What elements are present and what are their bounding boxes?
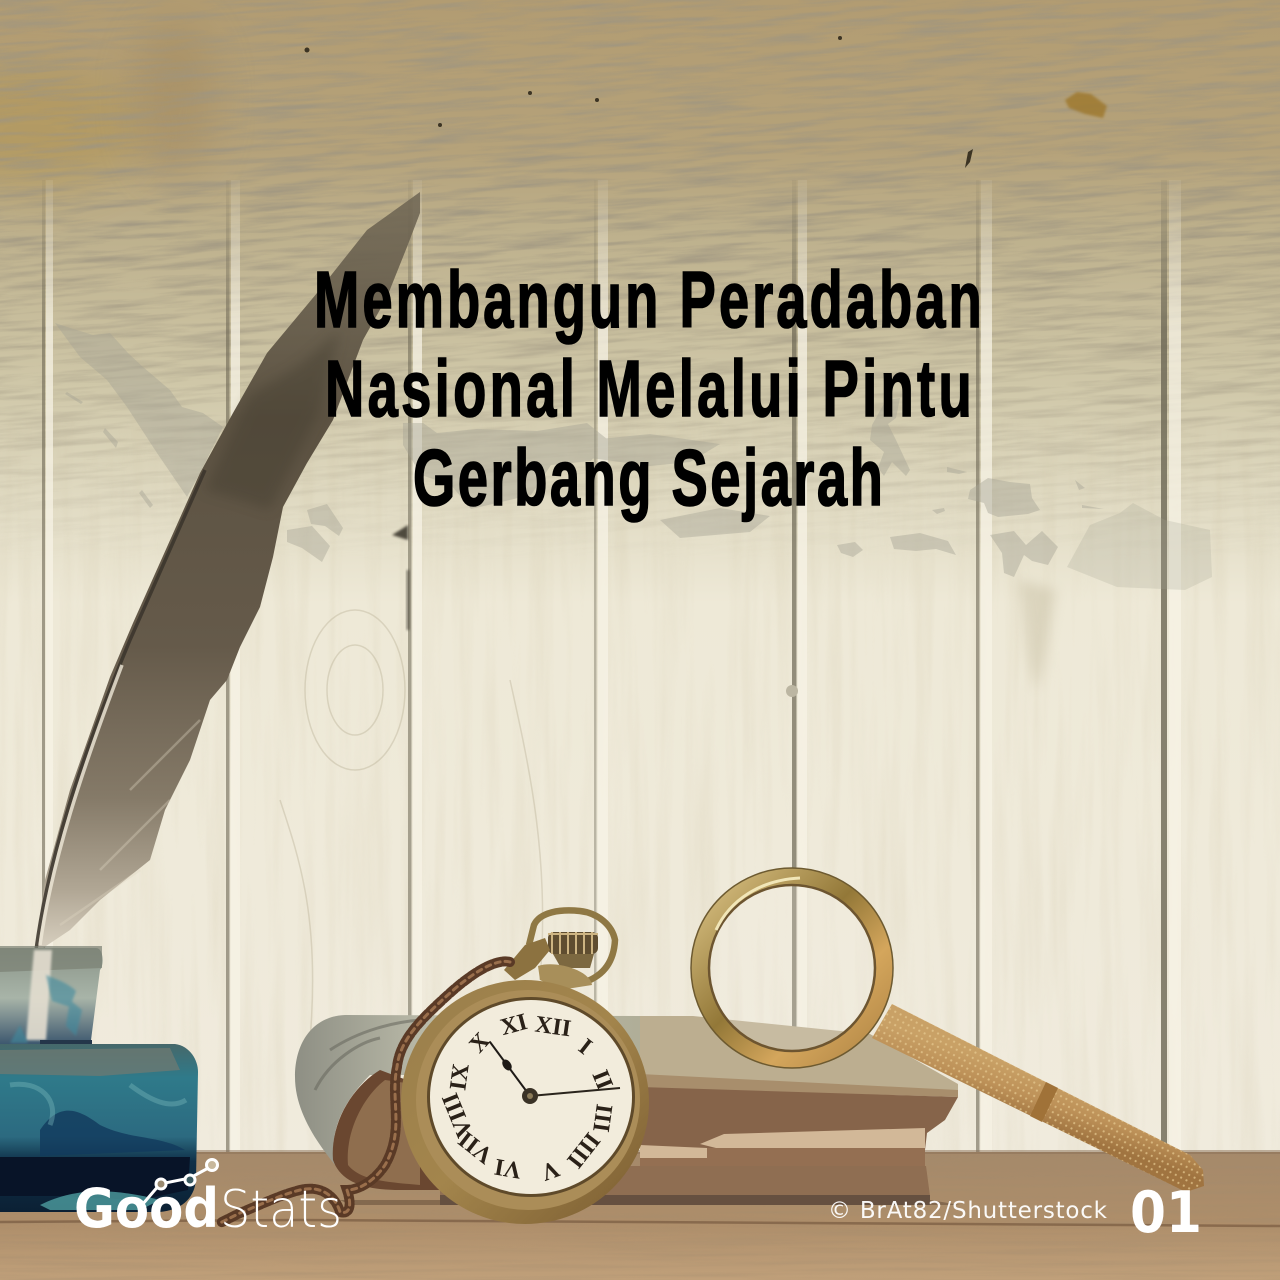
title: Nasional Melalui Pintu [325,345,972,434]
logo: GoodStats: Good [74,1177,219,1240]
clock numerals: XI [498,1009,530,1041]
clock numerals: XII [533,1012,573,1042]
chain [220,961,510,1223]
page number: 01 [1130,1180,1202,1246]
clock numerals [437,1009,618,1185]
clock numerals: X [465,1027,496,1058]
clock numerals: VI [493,1153,523,1183]
table [0,1150,1280,1280]
icon: feather quill [35,192,420,950]
clock numerals: IIII [561,1127,605,1173]
title: Gerbang Sejarah [413,434,883,523]
clock numerals: V [537,1155,563,1185]
title: Membangun Peradaban [314,256,982,345]
icon: magnifying glass [691,868,1204,1192]
title [314,256,982,523]
photo credit: © BrAt82/Shutterstock [828,1198,1108,1224]
logo: GoodStats [74,1160,342,1240]
clock numerals: VIII [437,1089,479,1141]
map of Indonesia watermark [55,323,1104,577]
clock hands [490,1042,620,1104]
icon: pocket watch [220,910,649,1224]
clock numerals: I [573,1034,597,1060]
clock numerals: III [587,1102,617,1134]
map: Papua [1067,503,1212,590]
clock numerals: II [586,1066,618,1094]
logo: GoodStats: Stats [220,1180,342,1240]
clock numerals: VII [454,1126,498,1168]
clock numerals: IX [445,1061,475,1092]
icon: ink bottle [0,946,198,1212]
icon: old book [295,1015,960,1205]
